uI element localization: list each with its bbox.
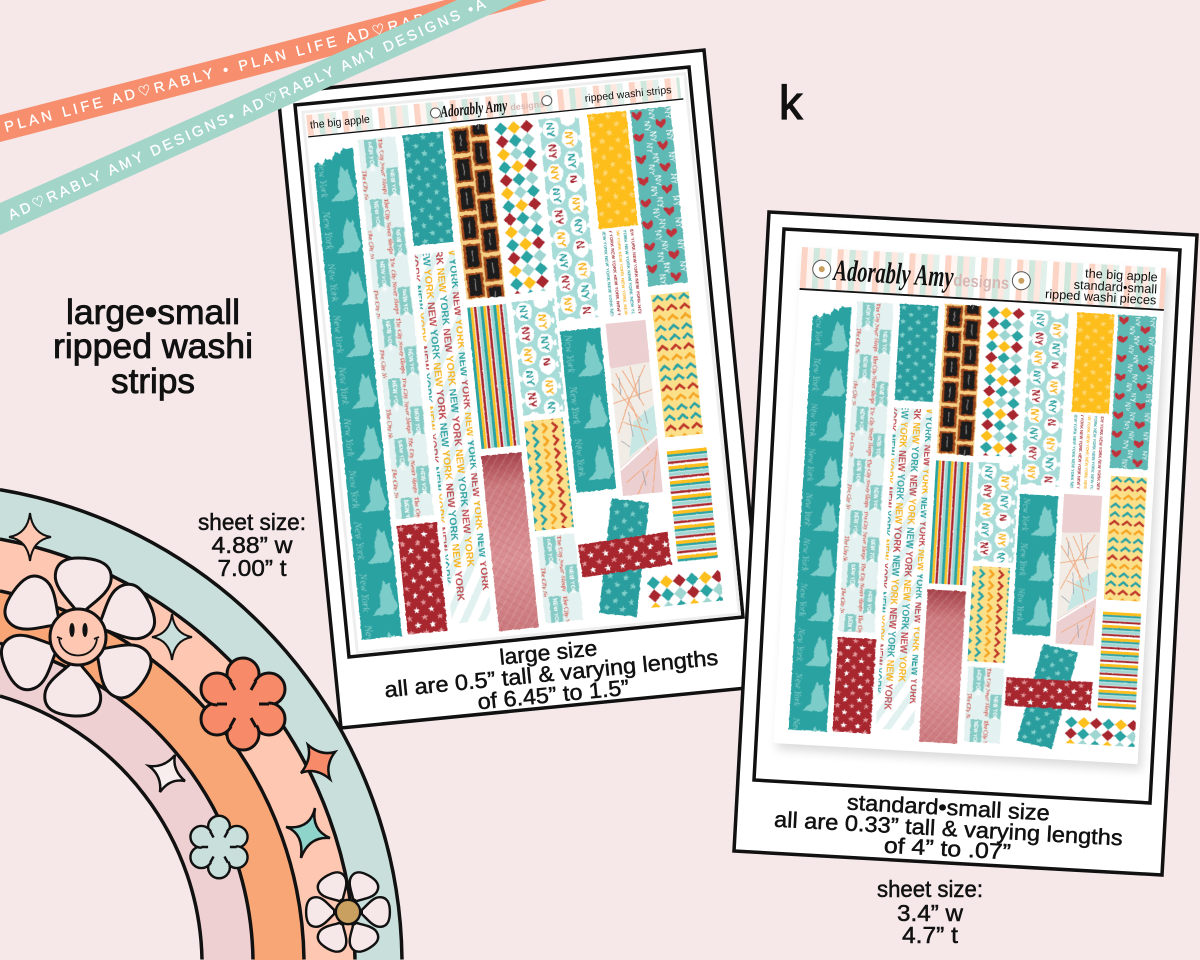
icon: small daisy — [306, 868, 390, 956]
strip: new york text: NEW YORK NEW YORK NEW YORK NEW YORK NEW YORK NEW YORK — [405, 224, 453, 585]
strip: city banner short — [964, 666, 1004, 744]
strip: red stars crossed — [578, 532, 672, 578]
strip: tiny new york: NEW YORK NEW YORK NEW YORK NEW YORK NEW YORK — [1087, 405, 1099, 519]
strip: teal stars — [895, 304, 938, 402]
strip: new york text: NEW YORK NEW YORK NEW YORK NEW YORK NEW YORK NEW YORK — [418, 241, 467, 602]
strip: teal stars crossed — [1017, 644, 1078, 749]
strip: new york text: NEW YORK NEW YORK NEW YORK NEW YORK NEW YORK NEW YORK — [443, 231, 492, 592]
strip: teal stars — [403, 131, 454, 246]
text: large sheet size: sheet size: — [198, 509, 306, 535]
caption: standard small size — [773, 790, 1123, 864]
strip: new york text: NEW YORK NEW YORK NEW YORK NEW YORK NEW YORK NEW YORK — [871, 381, 900, 694]
header band: ripped washi pieces — [1045, 287, 1157, 308]
letter k: k — [779, 76, 803, 129]
strip: argyle — [494, 119, 550, 294]
strip: map — [1055, 494, 1102, 646]
strip: NY circles — [539, 116, 599, 321]
strip: city banner long — [358, 136, 434, 519]
header band: the big apple — [1085, 266, 1158, 285]
strip: teal state short — [560, 328, 616, 493]
strip: new york text — [414, 250, 491, 624]
title — [53, 293, 253, 401]
strip: tiny new york — [1070, 414, 1104, 490]
strip: tiny new york: NEW YORK NEW YORK NEW YORK NEW YORK NEW YORK — [1094, 413, 1105, 527]
strip: chevron tall — [1104, 476, 1147, 602]
header band: ripped washi strips — [584, 84, 672, 105]
strip: NY circles short — [973, 462, 1019, 563]
strip: red watercolor — [481, 452, 539, 631]
icon: teal star — [286, 808, 330, 858]
strip: argyle horizontal — [1064, 716, 1136, 747]
icon: coral flower — [201, 658, 285, 750]
sticker page: large — [303, 74, 739, 653]
text: small sheet size: 4.7” t — [902, 922, 959, 948]
caption: standard small size: of 4” to .07” — [883, 833, 1011, 864]
header band: standard•small — [1073, 278, 1157, 297]
strip: film marquee — [449, 124, 505, 300]
strip: red watercolor — [919, 589, 966, 744]
caption: large size: large size — [498, 635, 598, 670]
strip: new york text — [876, 408, 933, 730]
text: small sheet size: sheet size: — [877, 876, 983, 902]
strip: NY circles — [1021, 310, 1069, 487]
header band — [800, 247, 1166, 310]
header band — [306, 77, 683, 137]
icon: peach sparkle — [9, 513, 51, 561]
strip: horizontal stripes — [1098, 612, 1141, 710]
strip: tiny new york: NEW YORK NEW YORK NEW YORK NEW YORK NEW YORK — [1080, 411, 1092, 525]
icon: smiley daisy — [0, 556, 161, 718]
strip: city banner short — [537, 533, 583, 624]
strip: new york text: NEW YORK NEW YORK NEW YORK NEW YORK NEW YORK NEW YORK — [895, 370, 925, 682]
title: strips — [111, 362, 195, 401]
text: small sheet size: 3.4” w — [897, 900, 963, 926]
text: large sheet size — [198, 509, 306, 581]
strip: argyle — [979, 306, 1025, 457]
strip: new york text: NEW YORK NEW YORK NEW YORK NEW YORK NEW YORK NEW YORK — [881, 397, 911, 710]
strip: vertical stripes — [467, 304, 520, 449]
strip: NY circles short — [512, 298, 565, 416]
strip: red stars crossed — [1005, 677, 1092, 711]
caption: standard small size: all are 0.33” tall & varying lengths — [773, 807, 1123, 850]
icon: teal sparkle — [152, 614, 192, 660]
strip: tiny new york: NEW YORK NEW YORK NEW YORK NEW YORK NEW YORK — [629, 226, 647, 357]
strip: tiny new york: NEW YORK NEW YORK NEW YORK NEW YORK NEW YORK — [601, 229, 619, 361]
rainbow arc illustration — [0, 490, 402, 960]
strip: red stars — [397, 522, 448, 634]
icon: white star — [149, 755, 185, 792]
header band: Adorably Amy — [831, 254, 955, 294]
strip: teal stars crossed — [599, 499, 649, 617]
strips group: small — [788, 296, 1159, 754]
strip: teal state long — [313, 146, 402, 640]
strip: yellow stars — [587, 111, 638, 229]
strip: argyle horizontal — [646, 570, 723, 608]
header band: Adorably Amy — [439, 96, 508, 121]
ribbon: plan life adorably — [0, 0, 547, 142]
text: large sheet size: 7.00” t — [218, 555, 287, 581]
header band: designs — [953, 271, 1010, 293]
strip: teal state long — [789, 304, 851, 732]
ribbon: adorably amy designs: AD♡RABLY AMY DESIGNS• AD♡RABLY AMY DESIGNS •A — [6, 0, 491, 224]
strip: yellow stars — [1072, 312, 1115, 414]
strip: map — [606, 320, 663, 496]
caption: standard small size: standard•small size — [846, 790, 1050, 825]
caption: large size: of 6.45” to 1.5” — [476, 675, 630, 714]
strip: tiny new york: NEW YORK NEW YORK NEW YORK NEW YORK NEW YORK — [607, 222, 626, 353]
strip: tiny new york: NEW YORK NEW YORK NEW YORK NEW YORK NEW YORK — [1074, 407, 1086, 521]
icon: coral star — [301, 745, 335, 779]
strip: tiny new york: NEW YORK NEW YORK NEW YORK NEW YORK NEW YORK — [1067, 413, 1079, 526]
strip: tiny new york: NEW YORK NEW YORK NEW YORK NEW YORK NEW YORK — [621, 217, 639, 349]
text: large sheet size: 4.88” w — [212, 532, 293, 558]
header band: designs — [510, 99, 545, 112]
strip: vertical stripes — [929, 460, 973, 585]
strip: red stars — [833, 637, 876, 734]
panel: large size sheet — [278, 50, 767, 728]
caption: large size — [383, 635, 719, 714]
ribbon: plan life adorably: PLAN LIFE AD♡RABLY • PLAN LIFE AD♡RAB — [3, 10, 429, 136]
text: small sheet size — [877, 876, 983, 948]
title: ripped washi — [53, 327, 253, 366]
strip: teal state short — [1012, 494, 1058, 636]
panel: standard small sheet — [734, 212, 1197, 875]
strip: horizontal stripes — [667, 447, 718, 562]
strip: film marquee — [936, 304, 982, 456]
strip: new york text: NEW YORK NEW YORK NEW YORK NEW YORK NEW YORK NEW YORK — [906, 392, 936, 705]
strip: NY hearts — [630, 106, 688, 286]
strip: chevron short — [967, 566, 1010, 663]
title: large•small — [66, 293, 240, 332]
strip: tiny new york — [602, 229, 642, 316]
strip: new york text: NEW YORK NEW YORK NEW YORK NEW YORK NEW YORK NEW YORK — [428, 207, 476, 568]
sticker page: small — [773, 247, 1170, 770]
strip: NY hearts — [1110, 315, 1156, 470]
icon: mint flower — [190, 816, 248, 878]
caption: large size: all are 0.5” tall & varying lengths — [383, 645, 719, 702]
strip: chevron tall — [651, 291, 703, 437]
strip: tiny new york: NEW YORK NEW YORK NEW YORK NEW YORK NEW YORK — [615, 225, 633, 357]
strip: city banner long — [838, 301, 894, 633]
strip: chevron short — [524, 418, 574, 531]
header band: the big apple — [309, 114, 370, 132]
